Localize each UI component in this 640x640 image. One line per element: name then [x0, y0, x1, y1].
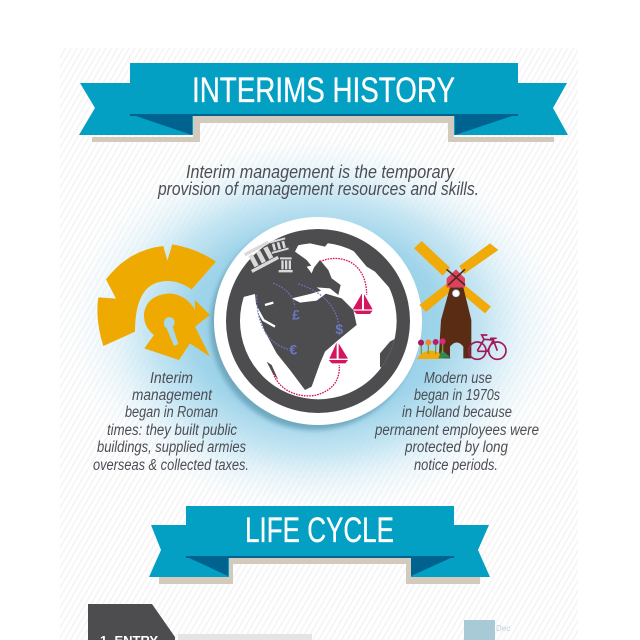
text: modern use: permanent employees were: [374, 422, 539, 439]
intro text: Interim management is the temporary: [186, 162, 455, 182]
trade routes: [257, 258, 367, 396]
banner: life cycle: [149, 506, 490, 584]
windmill cap: [447, 269, 465, 287]
step tab: entry: [88, 604, 175, 640]
blue glow: [66, 135, 566, 515]
heading: life cycle: LIFE CYCLE: [245, 511, 394, 550]
banner: interims history: [79, 63, 568, 142]
intro text: provision of management resources and skills.: [157, 179, 479, 199]
windmill blades: [414, 241, 498, 313]
bicycle: [469, 335, 506, 359]
dashed progress track: [178, 634, 312, 640]
text: modern use: began in 1970s: [414, 387, 500, 404]
icon: roman temples: [243, 237, 293, 273]
currency symbols: [289, 306, 343, 358]
globe: [210, 217, 422, 430]
icon: windmill, tulips and bicycle: [414, 241, 506, 359]
map land: [240, 243, 397, 400]
intro text: [157, 162, 479, 199]
text: modern use: notice periods.: [414, 457, 498, 474]
text: modern use: protected by long: [404, 439, 508, 456]
text: roman origins: management: [132, 387, 213, 404]
icon: roman helmet: [97, 244, 216, 360]
tulips: [417, 338, 451, 359]
text: modern use: Modern use: [424, 370, 492, 387]
text: roman origins: overseas & collected taxes.: [93, 457, 249, 474]
text: roman origins: buildings, supplied armies: [97, 439, 246, 456]
icon: sailing boats: [329, 293, 373, 363]
currency symbols: €: [289, 342, 297, 358]
striped background panel: [60, 48, 578, 640]
timeline block: december: [464, 620, 510, 640]
text: modern use: [374, 370, 539, 474]
heading: interims history: INTERIMS HISTORY: [192, 71, 455, 110]
currency symbols: £: [292, 306, 300, 322]
windmill tower: [439, 287, 471, 358]
text: roman origins: Interim: [150, 370, 193, 387]
text: modern use: in Holland because: [402, 404, 512, 421]
timeline block: december: Dec: [496, 624, 510, 633]
text: roman origins: times: they built public: [107, 422, 237, 439]
currency symbols: $: [335, 321, 343, 337]
text: roman origins: [93, 370, 249, 474]
text: roman origins: began in Roman: [125, 404, 218, 421]
